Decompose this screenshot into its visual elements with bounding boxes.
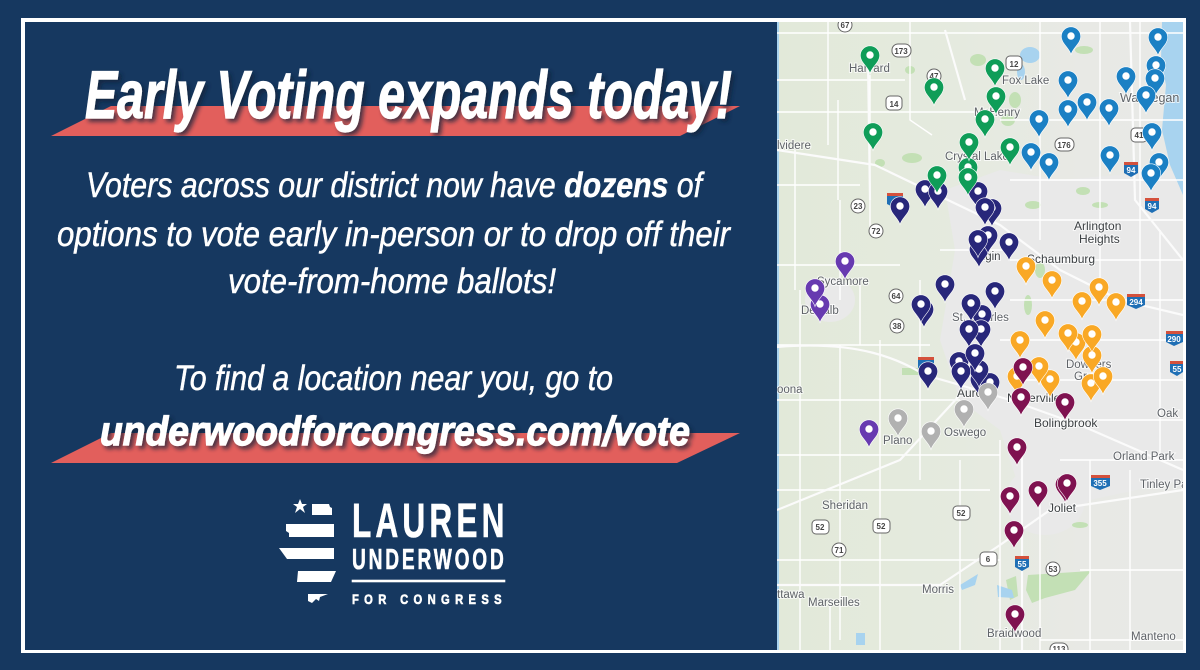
map: route shields: 12 — [1010, 60, 1019, 69]
map: route shields: 47 — [930, 72, 939, 81]
map: place labels: Plano — [883, 435, 912, 447]
map: place labels — [777, 63, 1197, 643]
map pins: purple — [805, 252, 879, 448]
map: place labels: Waukegan — [1120, 91, 1179, 105]
panel: message — [25, 22, 777, 650]
map: major roads — [777, 22, 1183, 650]
text block: voters — [57, 166, 731, 301]
interstate shields: 355 — [1093, 479, 1107, 488]
map: place labels: Joliet — [1048, 501, 1077, 515]
map: place labels: Elgin — [975, 251, 1001, 263]
text block: voters: options to vote early in-person or to drop off their — [57, 215, 731, 254]
map: route shields: 176 — [1057, 141, 1071, 150]
map: urban areas — [805, 172, 1000, 428]
map: route shields: 64 — [892, 292, 901, 301]
panel: map — [777, 18, 1197, 656]
map: place labels: Oak — [1157, 408, 1178, 420]
map: place labels: lvidere — [777, 140, 811, 152]
map: place labels: Braidwood — [987, 628, 1041, 640]
map: place labels: Orland Park — [1113, 451, 1175, 463]
map: place labels: Aurora — [957, 386, 993, 400]
map: place labels: Tinley Park — [1140, 479, 1197, 491]
interstate shields: 290 — [1167, 335, 1181, 344]
map: route shields: 113 — [1053, 645, 1066, 654]
map: place labels: Schaumburg — [1027, 252, 1095, 266]
title: Early Voting expands today! — [85, 57, 732, 133]
map pins: blue — [1021, 27, 1169, 192]
map: place labels: Fox Lake — [1002, 75, 1049, 87]
map: route shields: 71 — [835, 546, 844, 555]
map: place labels: oona — [777, 384, 803, 396]
map pins: navy — [890, 180, 1019, 400]
interstate shields: 55 — [1018, 560, 1027, 569]
logo — [279, 493, 505, 607]
interstate shields — [887, 162, 1184, 571]
map: place labels: Heights — [1079, 232, 1120, 246]
map: place labels: Naperville — [1007, 391, 1061, 405]
map: route shields: 6 — [986, 555, 991, 564]
map: place labels: Morris — [922, 584, 954, 596]
url: underwoodforcongress.com/vote — [100, 408, 690, 454]
interstate shields: 94 — [1148, 202, 1157, 211]
url accent bar — [51, 433, 740, 463]
map: route shields: 72 — [872, 227, 881, 236]
map: place labels: Crystal Lake — [945, 151, 1009, 163]
map: route shields: 14 — [890, 100, 899, 109]
map: place labels: Manteno — [1131, 631, 1176, 643]
text block: find a location: To find a location near you, go to — [174, 359, 613, 398]
interstate shields: 94 — [1127, 166, 1136, 175]
map pins: orange — [1007, 257, 1126, 402]
map: place labels: St. Charles — [952, 312, 1009, 324]
logo wordmark: UNDERWOOD — [352, 544, 504, 576]
map: place labels: Oswego — [944, 427, 986, 439]
map: place labels: DeKalb — [801, 305, 839, 317]
map: place labels: Marseilles — [808, 597, 860, 609]
map: route shields: 52 — [816, 523, 825, 532]
map: minor roads — [777, 22, 1183, 650]
map: place labels: Sheridan — [822, 500, 868, 512]
map: place labels: Grove — [1074, 371, 1105, 383]
map: lakes and rivers — [777, 22, 1183, 650]
map: place labels: Sycamore — [817, 276, 869, 288]
map: place labels: Bolingbrook — [1034, 416, 1098, 430]
map: place labels: Arlington — [1074, 219, 1121, 233]
map: place labels: Downers — [1066, 359, 1112, 371]
icon: Illinois flag stripes — [279, 499, 336, 603]
text block: voters: Voters across our district now have dozens of — [86, 166, 705, 205]
map: place labels: ttawa — [777, 589, 805, 601]
interstate shields: 55 — [1173, 365, 1182, 374]
headline accent bar — [51, 106, 740, 136]
map pins: maroon — [1000, 358, 1077, 632]
map: place labels: McHenry — [974, 107, 1020, 119]
map: route shields: 52 — [877, 522, 886, 531]
logo wordmark: FOR CONGRESS — [352, 592, 502, 607]
map: parks — [875, 46, 1108, 603]
map: route shields: 41 — [1135, 131, 1144, 140]
map: route shields: 38 — [893, 322, 902, 331]
map: route shields: 173 — [894, 47, 908, 56]
text block: voters: vote-from-home ballots! — [228, 262, 556, 301]
map: route shields: 67 — [841, 21, 850, 30]
logo wordmark: LAUREN — [352, 493, 504, 548]
map pins: green — [860, 46, 1020, 196]
logo wordmark — [352, 493, 505, 607]
map pins: gray — [888, 383, 998, 450]
map: route shields: 23 — [854, 202, 863, 211]
map: route shields: 52 — [957, 509, 966, 518]
map: place labels: Harvard — [849, 63, 890, 75]
map: route shields — [812, 18, 1184, 656]
map: route shields: 53 — [1049, 565, 1058, 574]
interstate shields: 294 — [1129, 298, 1143, 307]
